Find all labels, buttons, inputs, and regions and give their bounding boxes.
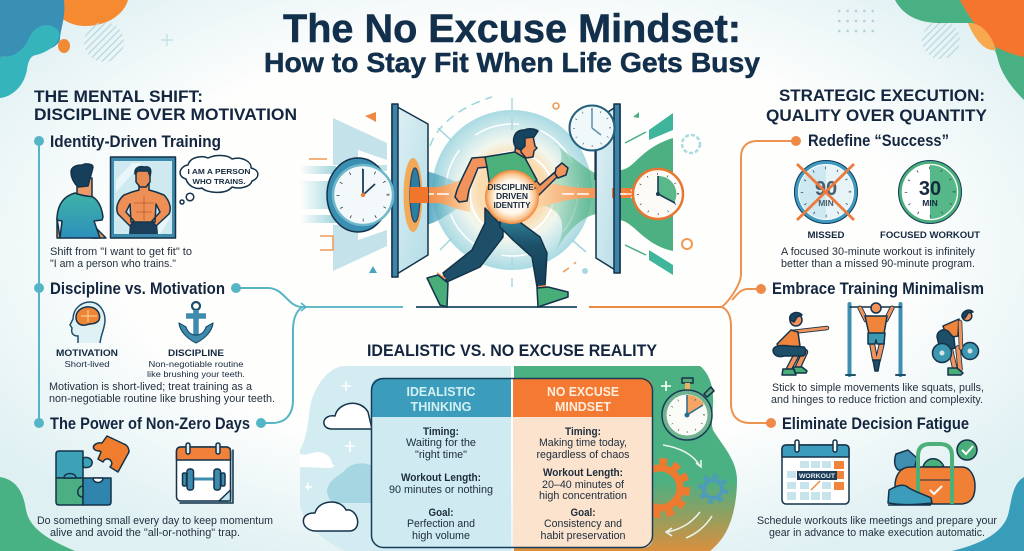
title [264,7,760,78]
rings and motion marks [430,97,586,287]
badge label: IDENTITY [494,201,531,210]
left header [371,378,511,417]
subheading: identity-driven training: Identity-Driven Training [50,133,221,151]
column text: no excuse: Making time today, [539,437,627,449]
header label: idealistic: THINKING [410,399,472,414]
icon: focused 30 minute clock: 30 [919,178,941,200]
connector lines left [34,136,302,428]
panel: mental shift [34,88,297,539]
title: The No Excuse Mindset: [283,7,741,51]
header label: no excuse: NO EXCUSE [547,384,619,399]
subheading: decision fatigue: Eliminate Decision Fatigue [782,415,969,433]
icon: gears and arrows [634,381,726,538]
icon: gym bag with shoe and check [888,440,977,505]
icon: workout calendar: WORKOUT [799,473,835,480]
runner figure [427,129,568,307]
heading: mental shift: DISCIPLINE OVER MOTIVATION [34,106,297,124]
icon: focused 30 minute clock [898,160,962,224]
heading: mental shift [34,88,297,124]
decoration: bottom-left corner shape [0,477,75,551]
callout: thought bubble [180,155,258,204]
icon: clouds [300,381,372,531]
callout: thought bubble: WHO TRAINS. [192,177,246,186]
text: decision fatigue: gear in advance to make execution automatic. [769,527,985,539]
column text: idealistic [389,426,493,542]
icon: missed 90 minute clock: MIN [818,198,834,208]
header label: no excuse [547,384,619,414]
label: focused workout: FOCUSED WORKOUT [880,230,980,241]
text: training minimalism [771,382,984,406]
icon: anchor [179,302,213,343]
heading: strategic execution: QUALITY OVER QUANTITY [766,107,987,125]
icon: brain in head [70,302,105,343]
column text: idealistic: Timing: [423,426,459,438]
header label: idealistic [406,384,476,414]
subheading: non-zero days: The Power of Non-Zero Days [50,415,250,433]
column text: no excuse: Consistency and [544,518,622,530]
icon: puzzle [56,436,129,505]
icon: person from behind [57,164,106,238]
callout: thought bubble: I AM A PERSON [188,167,250,176]
label: motivation: Short-lived [64,359,110,369]
right mirror [596,104,636,273]
icon: pull-up figure [846,303,905,375]
column text: idealistic: Perfection and [407,518,475,530]
connector lines right [722,136,801,428]
right column [513,378,653,548]
label: discipline [147,348,245,379]
icon: focused 30 minute clock: MIN [922,198,938,208]
table: comparison [371,378,653,548]
floating accents [309,103,700,275]
column text: idealistic: 90 minutes or nothing [389,484,493,496]
column text: idealistic: Waiting for the [406,437,476,449]
header label: idealistic: IDEALISTIC [406,384,476,399]
heading: strategic execution [766,87,987,125]
heading: idealistic vs reality: IDEALISTIC VS. NO EXCUSE REALITY [367,342,657,360]
decoration: top-right corner shapes [838,0,1024,100]
left clock [327,158,393,232]
column text: idealistic: high volume [412,530,470,542]
column text: no excuse [536,426,630,542]
icon: workout calendar [782,440,849,504]
text: identity shift: Shift from "I want to get fit" to [50,246,192,258]
icon: calendar dumbbell [176,443,233,503]
decoration: top-left corner shapes [0,0,173,98]
left light rays [300,118,387,271]
table outline [372,378,652,548]
label: motivation: MOTIVATION [56,348,118,359]
heading: mental shift: THE MENTAL SHIFT: [34,88,203,106]
text: training minimalism: and hinges to reduce friction and complexity. [771,394,983,406]
label: motivation [56,348,118,369]
column text: no excuse: 20–40 minutes of [542,479,625,491]
badge label: DRIVEN [496,192,528,201]
subheading: redefine success: Redefine “Success” [808,132,949,150]
column text: no excuse: regardless of chaos [536,449,630,461]
label: missed: MISSED [808,230,845,241]
right clock [633,169,683,219]
icon: missed 90 minute clock: 90 [815,178,837,200]
icon: stopwatch [662,378,714,440]
subheading: training minimalism: Embrace Training Minimalism [772,280,984,298]
text: decision fatigue: Schedule workouts like meetings and prepare your [757,515,997,527]
panel: strategic execution [757,87,997,539]
icon: missed 90 minute clock [794,160,858,224]
text: redefine success: A focused 30-minute workout is infinitely [781,246,975,258]
column text: idealistic: Goal: [428,507,454,519]
top clock [570,106,614,180]
label: discipline: Non-negotiable routine [148,359,244,369]
text: non-zero days: Do something small every day to keep momentum [37,515,273,527]
column text: no excuse: high concentration [539,490,627,502]
timeline divider under runner [301,303,722,311]
label: discipline: like brushing your teeth. [147,369,245,379]
text: motivation summary [49,381,275,405]
column text: no excuse: habit preservation [540,530,626,542]
text: training minimalism: Stick to simple movements like squats, pulls, [772,382,984,394]
icon: deadlift figure [932,310,978,375]
text: redefine success: better than a missed 90-minute program. [781,258,975,270]
text: identity shift: "I am a person who trains." [50,258,176,270]
badge label [488,183,537,210]
icon: squat figure [773,313,827,375]
text: identity shift [50,246,192,270]
column text: no excuse: Workout Length: [543,467,623,479]
title: How to Stay Fit When Life Gets Busy [264,47,760,78]
text: non-zero days [37,515,273,539]
column text: idealistic: Workout Length: [401,472,481,484]
label: discipline: DISCIPLINE [168,348,224,359]
column text: no excuse: Goal: [570,507,596,519]
decoration: bottom-right corner shape [952,477,1024,551]
icon: mirror with muscular reflection [110,157,176,238]
illustration: central runner scene [300,97,700,307]
column text: idealistic: "right time" [415,449,467,461]
column text: no excuse: Timing: [565,426,601,438]
left mirror [392,104,428,277]
left column [371,378,511,548]
right header [513,378,653,417]
text: decision fatigue [757,515,997,539]
halo circle [432,110,592,270]
text: motivation summary: Motivation is short-lived; treat training as a [49,381,253,393]
header label: no excuse: MINDSET [555,399,611,414]
text: non-zero days: alive and avoid the "all-or-nothing" trap. [50,527,240,539]
energy streams [410,138,673,251]
text: motivation summary: non-negotiable routine like brushing your teeth. [49,393,275,405]
heading: strategic execution: STRATEGIC EXECUTION: [779,87,985,105]
badge label: DISCIPLINE- [488,183,537,192]
text: redefine success [781,246,975,270]
subheading: discipline vs motivation: Discipline vs. Motivation [50,280,225,298]
panel: comparison backdrop [300,366,737,551]
